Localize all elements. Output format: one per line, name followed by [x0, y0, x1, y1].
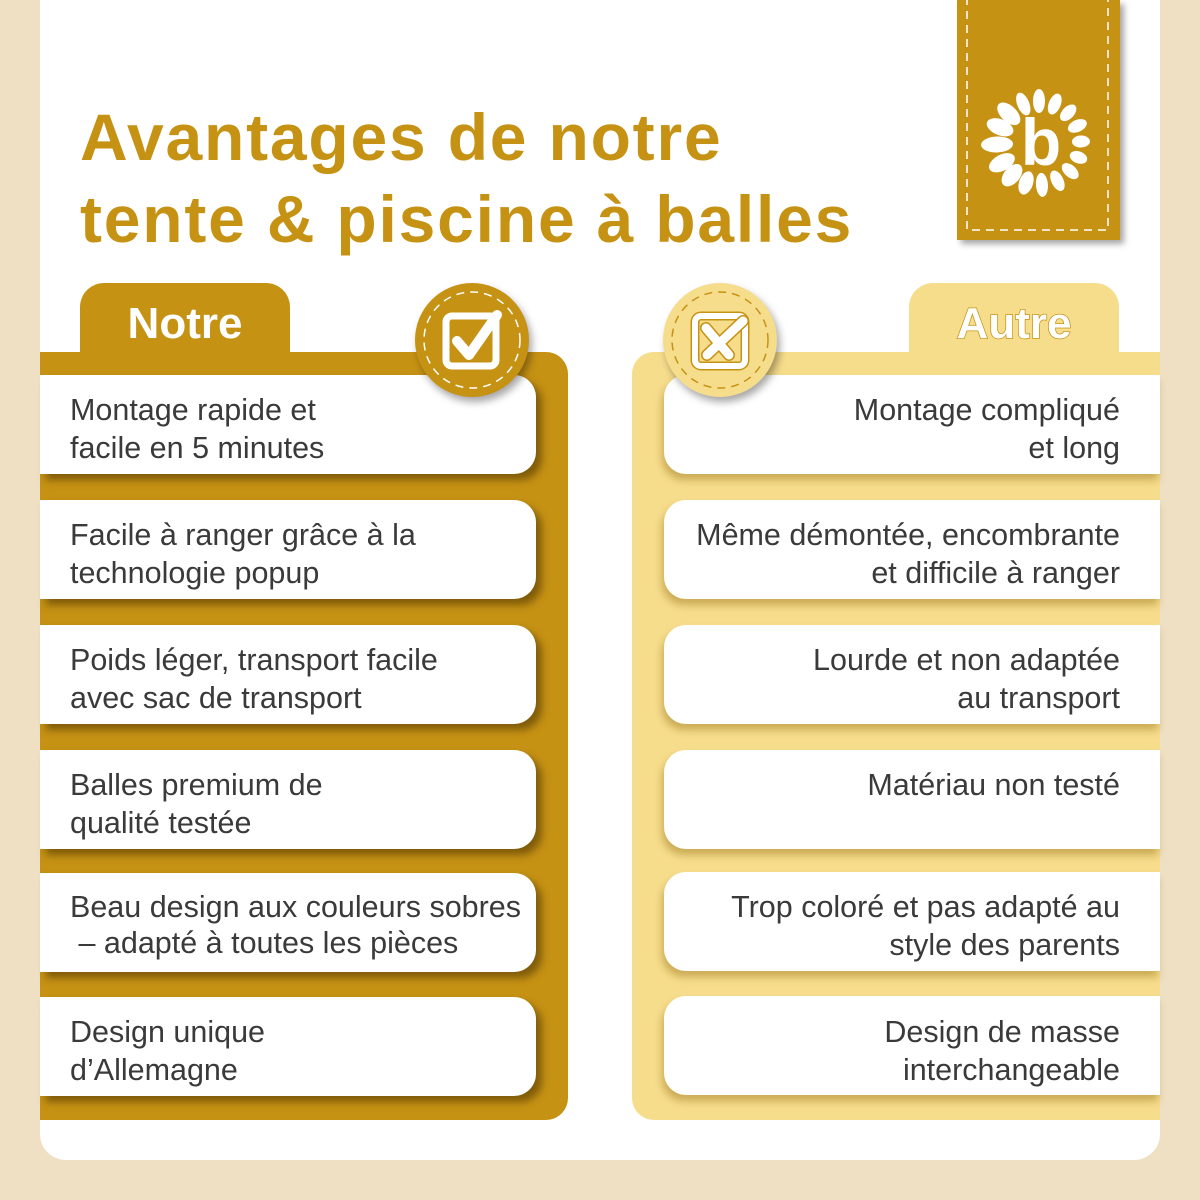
left items	[40, 375, 546, 1106]
item: Montage rapide et	[70, 393, 316, 427]
tab: notre: Notre	[128, 299, 242, 348]
item	[40, 997, 536, 1096]
item: technologie popup	[70, 556, 319, 590]
item: Matériau non testé	[867, 768, 1120, 802]
tab: notre	[80, 283, 290, 363]
title: tente & piscine à balles	[80, 182, 853, 256]
tab: autre	[909, 283, 1119, 363]
item: Montage compliqué	[854, 393, 1120, 427]
item: – adapté à toutes les pièces	[78, 926, 458, 960]
item: Beau design aux couleurs sobres	[70, 890, 521, 924]
item	[664, 996, 1160, 1095]
item	[40, 375, 536, 474]
item: d’Allemagne	[70, 1053, 238, 1087]
logo tag	[957, 0, 1120, 240]
right items	[658, 375, 1163, 1105]
item: facile en 5 minutes	[70, 431, 324, 465]
item: style des parents	[889, 928, 1120, 962]
icon: cross badge	[663, 283, 777, 397]
item: Trop coloré et pas adapté au	[731, 890, 1120, 924]
item	[664, 750, 1160, 849]
item: interchangeable	[903, 1053, 1120, 1087]
item	[40, 625, 536, 724]
item	[40, 750, 536, 849]
title: Avantages de notre	[80, 100, 722, 174]
item	[40, 873, 536, 972]
title	[80, 100, 853, 256]
item	[664, 872, 1160, 971]
item	[664, 500, 1160, 599]
item: et long	[1028, 431, 1120, 465]
icon: check badge	[415, 283, 529, 397]
item	[664, 375, 1160, 474]
item: Design unique	[70, 1015, 265, 1049]
item: Facile à ranger grâce à la	[70, 518, 416, 552]
item	[664, 625, 1160, 724]
item: au transport	[957, 681, 1120, 715]
item: avec sac de transport	[70, 681, 362, 715]
tab: autre: Autre	[957, 299, 1071, 348]
panel: autre	[632, 352, 1160, 1120]
logo tag: b	[1021, 105, 1061, 179]
item: qualité testée	[70, 806, 251, 840]
item: Lourde et non adaptée	[813, 643, 1120, 677]
item	[40, 500, 536, 599]
item: Poids léger, transport facile	[70, 643, 438, 677]
item: Même démontée, encombrante	[696, 518, 1120, 552]
item: Design de masse	[884, 1015, 1120, 1049]
panel: notre	[40, 352, 568, 1120]
item: Balles premium de	[70, 768, 323, 802]
item: et difficile à ranger	[871, 556, 1120, 590]
